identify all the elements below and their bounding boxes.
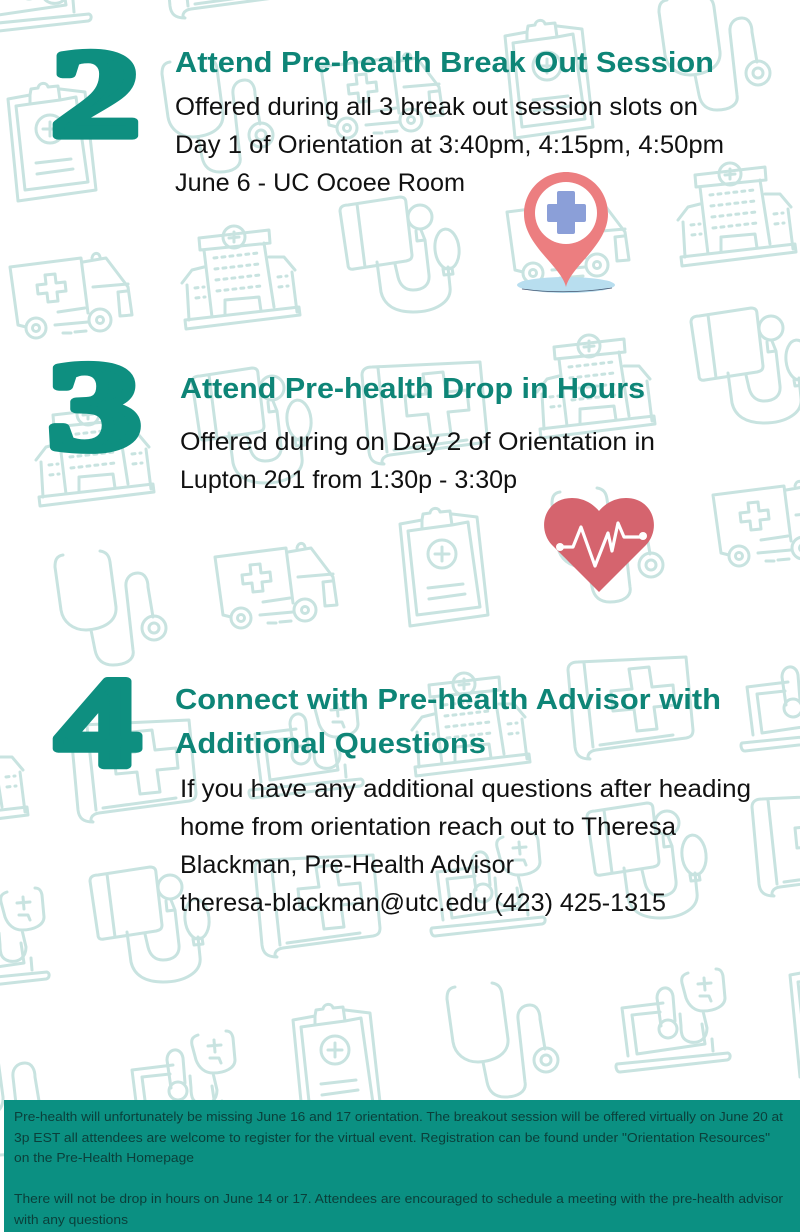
panel: step 3 <box>48 337 655 592</box>
text block: step 2 details: Day 1 of Orientation at 3:40pm, 4:15pm, 4:50pm <box>175 131 724 159</box>
text block: notice: on the Pre-Health Homepage <box>14 1151 194 1165</box>
text block: step 4 details <box>180 775 751 917</box>
text block: step 4 details: home from orientation reach out to Theresa <box>180 813 676 841</box>
heading: step 4 <box>175 684 721 760</box>
number 3: 3 <box>48 337 141 476</box>
text block: step 2 details: Offered during all 3 break out session slots on <box>175 93 698 121</box>
text block: step 2 details: June 6 - UC Ocoee Room <box>175 169 465 197</box>
text block: step 3 details <box>180 428 655 494</box>
panel: step 4 <box>56 652 751 917</box>
number 4: 4 <box>56 652 140 793</box>
icon: heart with pulse line <box>544 498 654 592</box>
heading: step 2: Attend Pre-health Break Out Session <box>175 47 714 79</box>
icon: location pin with medical cross <box>517 172 615 293</box>
panel: footer notice <box>4 1100 800 1232</box>
heading: step 4: Additional Questions <box>175 728 486 760</box>
text block: step 2 details <box>175 93 724 197</box>
text block: notice: 3p EST all attendees are welcome to register for the virtual event. Registration can be found under "Orientation Resources" <box>14 1131 770 1145</box>
heading: step 4: Connect with Pre-health Advisor with <box>175 684 721 716</box>
text block: step 3 details: Offered during on Day 2 of Orientation in <box>180 428 655 456</box>
text block: step 4 details: theresa-blackman@utc.edu (423) 425-1315 <box>180 889 666 917</box>
text block: step 3 details: Lupton 201 from 1:30p - 3:30p <box>180 466 517 494</box>
text block: notice: with any questions <box>13 1213 128 1227</box>
text block: step 4 details: Blackman, Pre-Health Advisor <box>180 851 514 879</box>
panel: step 2 <box>51 25 724 293</box>
heading: step 3: Attend Pre-health Drop in Hours <box>180 373 645 405</box>
text block: notice <box>13 1110 784 1227</box>
number 2: 2 <box>51 25 140 163</box>
text block: notice: There will not be drop in hours on June 14 or 17. Attendees are encouraged to schedule a meeting with the pre-health advisor <box>14 1192 783 1206</box>
text block: notice: Pre-health will unfortunately be missing June 16 and 17 orientation. The breakout session will be offered virtually on June 20 at <box>14 1110 784 1124</box>
text block: step 4 details: If you have any additional questions after heading <box>180 775 751 803</box>
